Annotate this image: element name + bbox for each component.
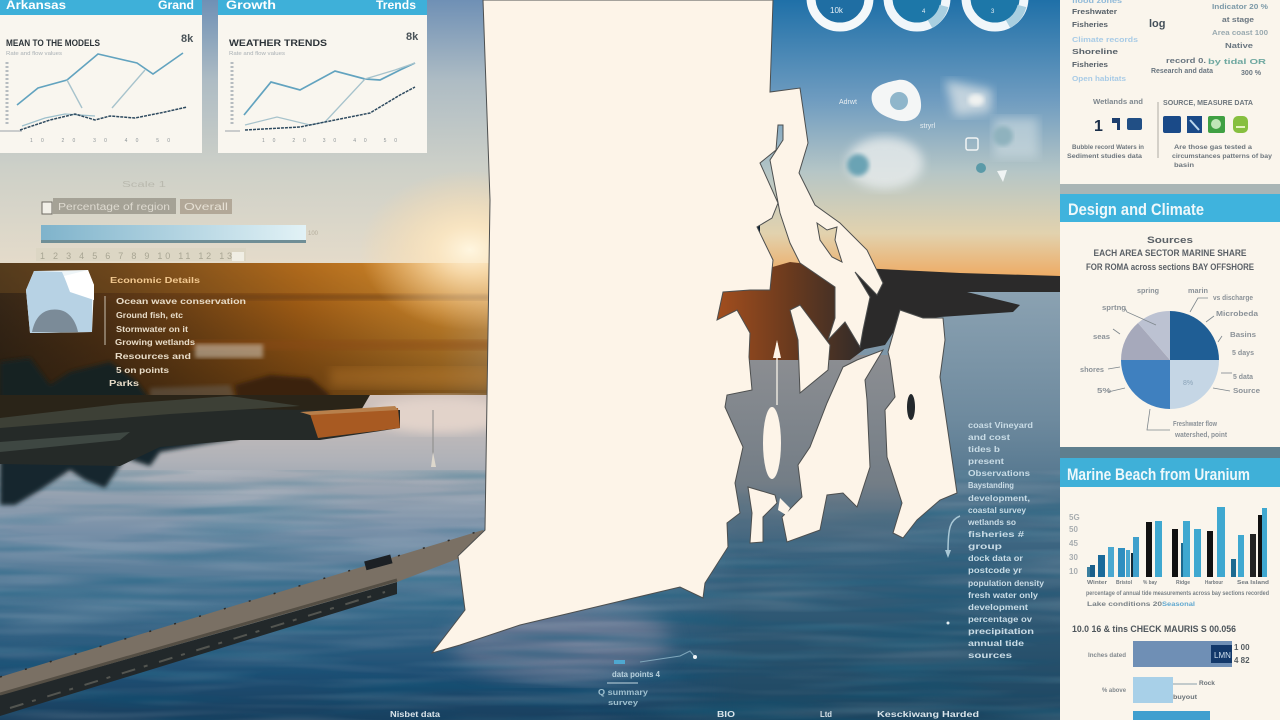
- pie heading: [1086, 235, 1254, 272]
- right stat list: Indicator 20 %: [1212, 4, 1269, 11]
- icons: left pair: [1094, 118, 1142, 135]
- text block: land notes: Resources and: [115, 352, 191, 361]
- icon: left cloud marker: [847, 137, 923, 189]
- pie chart: [1121, 311, 1219, 409]
- left shore land: [0, 395, 370, 450]
- icon captions: [1067, 144, 1272, 169]
- icon captions: basin: [1174, 162, 1194, 169]
- column labels: Harbour: [1205, 580, 1224, 586]
- pie heading: FOR ROMA across sections BAY OFFSHORE: [1086, 262, 1254, 272]
- left stat list: Fisheries: [1072, 62, 1108, 69]
- left stat list: Fisheries: [1072, 22, 1108, 29]
- text block: water notes: coast Vineyard: [968, 421, 1033, 430]
- text block: land notes: Ground fish, etc: [116, 311, 184, 320]
- icon captions: Bubble record Waters in: [1072, 144, 1144, 151]
- icons: left pair: 1: [1094, 118, 1103, 135]
- text block: water notes: and cost: [968, 433, 1010, 442]
- left stat list: [1072, 0, 1138, 83]
- map: islet: [778, 498, 790, 515]
- text block: water notes: Baystanding: [968, 481, 1014, 490]
- vertical axis labels: 10: [1069, 567, 1078, 576]
- panel one header: [0, 0, 202, 15]
- text block: land notes: Economic Details: [110, 276, 201, 285]
- pie labels: Source: [1233, 388, 1260, 395]
- map: oval island: [763, 407, 781, 479]
- map: mainland and east bay: [432, 0, 883, 653]
- chart footnote: [1086, 591, 1269, 608]
- sun glow: [360, 170, 580, 330]
- column chart: [1087, 507, 1267, 577]
- icon: progress ring three: 3: [991, 9, 995, 15]
- text block: water notes: coastal survey: [968, 506, 1027, 515]
- horizontal bar labels: [1088, 643, 1250, 701]
- chart footnote: Lake conditions 20: [1087, 602, 1163, 608]
- text block: water notes: precipitation: [968, 627, 1034, 636]
- panel: left line chart two: [218, 0, 427, 153]
- divider rule: [1157, 102, 1159, 158]
- pie heading: EACH AREA SECTOR MARINE SHARE: [1094, 248, 1246, 258]
- left stat list: Shoreline: [1072, 49, 1118, 56]
- pie labels: sprtng: [1102, 305, 1126, 312]
- water annotation: [598, 651, 697, 707]
- panel: left line chart one: [0, 0, 202, 153]
- pie labels: spring: [1137, 288, 1159, 295]
- icon: progress ring one: [811, 0, 869, 27]
- text block: water notes: development: [968, 603, 1028, 612]
- left stat list: Open habitats: [1072, 76, 1126, 83]
- bottom captions: BIO: [717, 710, 735, 719]
- panel two header: [218, 0, 427, 15]
- chart two lines: [225, 62, 415, 131]
- pie heading: Sources: [1147, 235, 1193, 245]
- text block: water notes: fresh water only: [968, 591, 1039, 600]
- down arrow: [945, 516, 960, 558]
- text block: water notes: tides b: [968, 445, 1000, 454]
- vertical axis labels: 30: [1069, 553, 1078, 562]
- column labels: Sea Island: [1237, 580, 1269, 586]
- vertical axis labels: 5G: [1069, 513, 1080, 522]
- caption over sky: Scale 1: [122, 180, 167, 189]
- chart one title: MEAN TO THE MODELS: [6, 38, 100, 48]
- chart two subtitle: Rate and flow values: [229, 51, 286, 57]
- pie labels: marin: [1188, 288, 1208, 295]
- icons: app tiles: [1163, 116, 1248, 133]
- text block: water notes: sources: [968, 651, 1013, 660]
- right stat list: Native: [1225, 43, 1253, 50]
- text block: water notes: development,: [968, 494, 1030, 503]
- pie labels: vs discharge: [1213, 295, 1253, 302]
- pie labels: watershed, point: [1174, 432, 1228, 439]
- log label: log: [1149, 18, 1166, 30]
- chart two badge: 8k: [406, 31, 419, 43]
- map: pond: [907, 394, 915, 420]
- text block: water notes: wetlands so: [967, 518, 1016, 527]
- right stat list: record 0.: [1166, 58, 1206, 65]
- horizontal bar labels: % above: [1102, 687, 1126, 694]
- text block: land notes: Growing wetlands: [115, 338, 196, 347]
- water annotation: Q summary: [598, 688, 649, 697]
- horizontal bar labels: 4 82: [1234, 656, 1250, 665]
- icon captions: Sediment studies data: [1067, 153, 1142, 160]
- horizontal bar labels: 1 00: [1234, 643, 1250, 652]
- pie labels: Microbeda: [1216, 311, 1258, 318]
- pie labels: Basins: [1230, 332, 1256, 339]
- dark headland: [860, 268, 1060, 350]
- right stat list: 300 %: [1241, 70, 1262, 77]
- icon: white blob marker: [839, 80, 936, 130]
- pie callouts: [1108, 298, 1232, 430]
- left stat list: Climate records: [1072, 37, 1138, 44]
- bottom captions: Nisbet data: [390, 710, 441, 719]
- background: right sky: [760, 0, 1060, 278]
- bottom captions: [390, 710, 979, 719]
- icon captions: circumstances patterns of bay: [1172, 153, 1272, 160]
- legend boxes: [42, 198, 232, 214]
- bay water: [725, 355, 900, 570]
- marker dot on water: [946, 622, 950, 624]
- vertical axis labels: 45: [1069, 539, 1078, 548]
- icon: progress ring three: [966, 0, 1024, 27]
- horizontal bars: LMN: [1214, 651, 1231, 660]
- map: large bay island: [782, 350, 883, 542]
- chart one subtitle: Rate and flow values: [6, 51, 63, 57]
- background: left sky: [0, 0, 500, 270]
- pie labels: Freshwater flow: [1173, 421, 1217, 428]
- panel shadow band: [1060, 184, 1280, 195]
- text block: water notes: dock data or: [968, 554, 1023, 563]
- horizontal bar labels: Inches dated: [1088, 652, 1126, 659]
- pie labels: shores: [1080, 367, 1104, 374]
- panel: right top notes: [1060, 0, 1280, 184]
- horizontal chart title: 10.0 16 & tins CHECK MAURIS S 00.056: [1072, 624, 1236, 635]
- arrow on map: [773, 340, 781, 405]
- text block: water notes: Observations: [968, 469, 1031, 478]
- right stat list: Research and data: [1151, 68, 1213, 75]
- chart one lines: [0, 53, 187, 131]
- chart one badge: 8k: [181, 33, 194, 45]
- shoreline reflection: [0, 438, 240, 505]
- column labels: Winter: [1087, 580, 1108, 586]
- pier: [0, 530, 486, 716]
- right stat list: Area coast 100: [1212, 30, 1268, 37]
- pie labels: [1080, 288, 1260, 439]
- water annotation: survey: [608, 700, 638, 707]
- horizontal bars: [1133, 641, 1232, 720]
- text block: land notes: Ocean wave conservation: [116, 297, 246, 306]
- text block: land notes: 5 on points: [116, 366, 170, 375]
- panel: right top notes: SOURCE, MEASURE DATA: [1163, 100, 1253, 107]
- pie chart: 8%: [1183, 380, 1193, 387]
- progress bar: 100: [308, 231, 319, 237]
- icon: progress ring two: [888, 0, 946, 27]
- column labels: % bay: [1143, 580, 1158, 586]
- vertical axis labels: 50: [1069, 525, 1078, 534]
- text block: water notes: annual tide: [968, 639, 1025, 648]
- column labels: Bristol: [1116, 580, 1132, 586]
- column labels: Ridge: [1176, 580, 1190, 586]
- text block: water notes: group: [968, 542, 1002, 551]
- bottom captions: Ltd: [820, 710, 832, 719]
- right stat list: at stage: [1222, 17, 1254, 24]
- map: lower island: [748, 487, 777, 543]
- brown shoreline: [710, 262, 870, 360]
- chart footnote: Seasonal: [1162, 602, 1195, 608]
- text block: water notes: percentage ov: [968, 615, 1033, 624]
- right stat list: [1151, 4, 1269, 77]
- pie labels: 5 days: [1232, 350, 1254, 357]
- text block: land notes: [105, 276, 246, 388]
- icon: progress ring two: 4: [922, 9, 926, 15]
- panel shadow band: [1060, 447, 1280, 458]
- icon: map thumbnail: [26, 270, 94, 333]
- icon: white blob marker: stryrl: [920, 123, 936, 130]
- text block: water notes: [967, 421, 1045, 660]
- water annotation: data points 4: [612, 670, 661, 679]
- legend boxes: Percentage of region: [58, 202, 170, 213]
- pie labels: seas: [1093, 334, 1110, 341]
- icon captions: Are those gas tested a: [1174, 144, 1252, 151]
- horizontal bar labels: buyout: [1173, 694, 1198, 701]
- horizontal bar labels: Rock: [1199, 680, 1215, 687]
- panel: bar charts: [1060, 458, 1280, 720]
- text block: water notes: population density: [968, 579, 1045, 588]
- text block: water notes: postcode yr: [968, 566, 1022, 575]
- column labels: [1087, 580, 1269, 586]
- scale strip: 1 2 3 4 5 6 7 8 9 10 11 12 13: [40, 251, 232, 261]
- icon: right cloud marker: [966, 118, 1038, 182]
- vertical axis labels: [1069, 513, 1080, 576]
- progress bar: [41, 225, 319, 243]
- map: central island: [790, 305, 830, 393]
- left stat list: Freshwater: [1072, 9, 1117, 16]
- jetty: [0, 396, 400, 466]
- water ripples: [0, 470, 1060, 720]
- sailboat: [431, 410, 436, 467]
- background: water: [0, 290, 1060, 720]
- text block: land notes: Parks: [109, 379, 140, 388]
- pie labels: 5 data: [1233, 374, 1253, 381]
- map: eastern island: [885, 310, 957, 538]
- background: left land: [0, 263, 500, 420]
- legend boxes: Overall: [184, 202, 228, 213]
- pie header: Design and Climate: [1068, 200, 1204, 219]
- right stat list: by tidal OR: [1208, 59, 1266, 66]
- text block: land notes: Stormwater on it: [116, 325, 188, 334]
- icon: pale cloud marker: [945, 80, 992, 116]
- bottom captions: Kesckiwang Harded: [877, 710, 979, 719]
- text block: water notes: fisheries #: [968, 530, 1025, 539]
- icon: white blob marker: Adrwt: [839, 99, 857, 106]
- panel: pie chart: [1060, 194, 1280, 447]
- chart two axis labels: 10 20 30 40 50: [262, 138, 397, 144]
- sub headings: Wetlands and: [1093, 99, 1143, 106]
- text block: water notes: present: [968, 457, 1004, 466]
- pie header: [1060, 194, 1280, 222]
- pie labels: 5%: [1097, 388, 1112, 395]
- chart one axis labels: 10 20 30 40 50: [30, 138, 170, 144]
- small pale rectangle: [195, 344, 263, 358]
- icon: progress ring one: 10k: [830, 6, 844, 15]
- chart two title: WEATHER TRENDS: [229, 38, 327, 48]
- bars header: [1060, 458, 1280, 487]
